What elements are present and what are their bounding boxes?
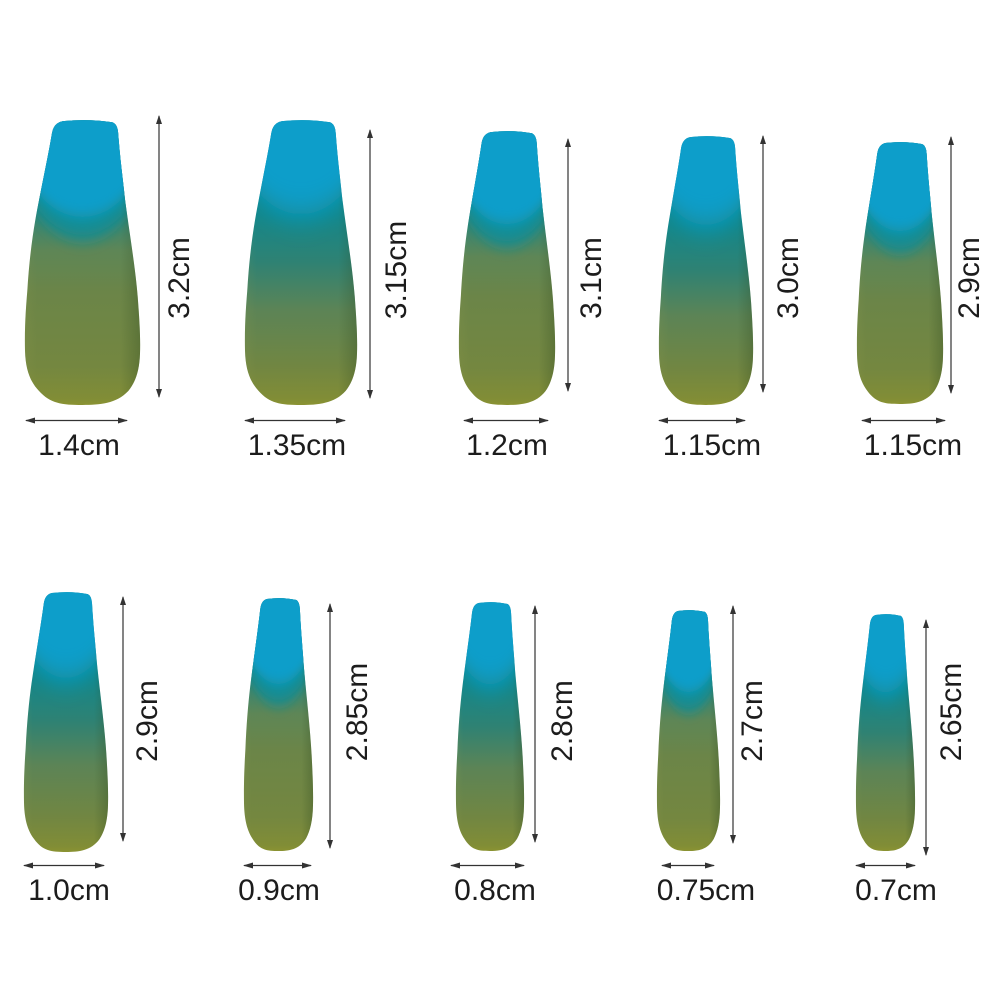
width arrow 8 <box>450 862 525 868</box>
width label 6: 1.0cm <box>28 874 110 907</box>
nail 6 <box>19 527 113 857</box>
nail 2 <box>238 49 364 411</box>
nail size 4: 1.15cm by 3.0cm <box>653 69 805 462</box>
width label 2: 1.35cm <box>248 429 346 462</box>
height arrow 4 <box>760 135 766 393</box>
nail 8 <box>452 540 528 856</box>
width label 9: 0.75cm <box>657 874 755 907</box>
width label 7: 0.9cm <box>238 874 320 907</box>
height label 7: 2.85cm <box>341 663 374 761</box>
nail 7 <box>241 542 316 856</box>
nail size 7: 0.9cm by 2.85cm <box>238 542 374 907</box>
width label 10: 0.7cm <box>855 874 937 907</box>
nail size 3: 1.2cm by 3.1cm <box>454 71 608 462</box>
width label 4: 1.15cm <box>663 429 761 462</box>
nail size 2: 1.35cm by 3.15cm <box>238 49 413 462</box>
height label 9: 2.7cm <box>736 680 769 762</box>
width arrow 10 <box>855 862 916 868</box>
width arrow 3 <box>463 418 549 424</box>
height arrow 1 <box>156 115 162 398</box>
height label 4: 3.0cm <box>772 237 805 319</box>
height arrow 3 <box>565 138 571 392</box>
width label 5: 1.15cm <box>864 429 962 462</box>
height label 5: 2.9cm <box>953 237 986 319</box>
height arrow 10 <box>923 619 929 856</box>
height label 8: 2.8cm <box>546 680 579 762</box>
nail 4 <box>653 69 759 410</box>
width arrow 7 <box>243 862 312 868</box>
nail 3 <box>454 71 560 410</box>
nail size 10: 0.7cm by 2.65cm <box>852 555 968 907</box>
height label 2: 3.15cm <box>380 221 413 319</box>
height label 3: 3.1cm <box>575 237 608 319</box>
nail size 6: 1.0cm by 2.9cm <box>19 527 164 907</box>
nail 1 <box>19 57 146 411</box>
height arrow 2 <box>367 129 373 399</box>
width arrow 6 <box>23 862 105 868</box>
width arrow 1 <box>25 418 128 424</box>
height arrow 8 <box>532 605 538 843</box>
width label 3: 1.2cm <box>466 429 548 462</box>
height arrow 7 <box>327 603 333 849</box>
width arrow 4 <box>658 418 746 424</box>
nail size 8: 0.8cm by 2.8cm <box>450 540 579 907</box>
height arrow 6 <box>120 596 126 842</box>
height arrow 5 <box>948 136 954 394</box>
height label 6: 2.9cm <box>131 680 164 762</box>
nail size 1: 1.4cm by 3.2cm <box>19 57 196 462</box>
width label 8: 0.8cm <box>454 874 536 907</box>
nail size 5: 1.15cm by 2.9cm <box>853 84 986 462</box>
nail 9 <box>654 557 723 856</box>
height label 10: 2.65cm <box>935 663 968 761</box>
width arrow 5 <box>861 418 946 424</box>
width arrow 9 <box>661 862 715 868</box>
height label 1: 3.2cm <box>163 237 196 319</box>
height arrow 9 <box>730 605 736 844</box>
nail 5 <box>853 84 947 409</box>
width arrow 2 <box>244 418 346 424</box>
nail 10 <box>852 555 919 856</box>
nail size 9: 0.75cm by 2.7cm <box>654 557 769 907</box>
width label 1: 1.4cm <box>38 429 120 462</box>
